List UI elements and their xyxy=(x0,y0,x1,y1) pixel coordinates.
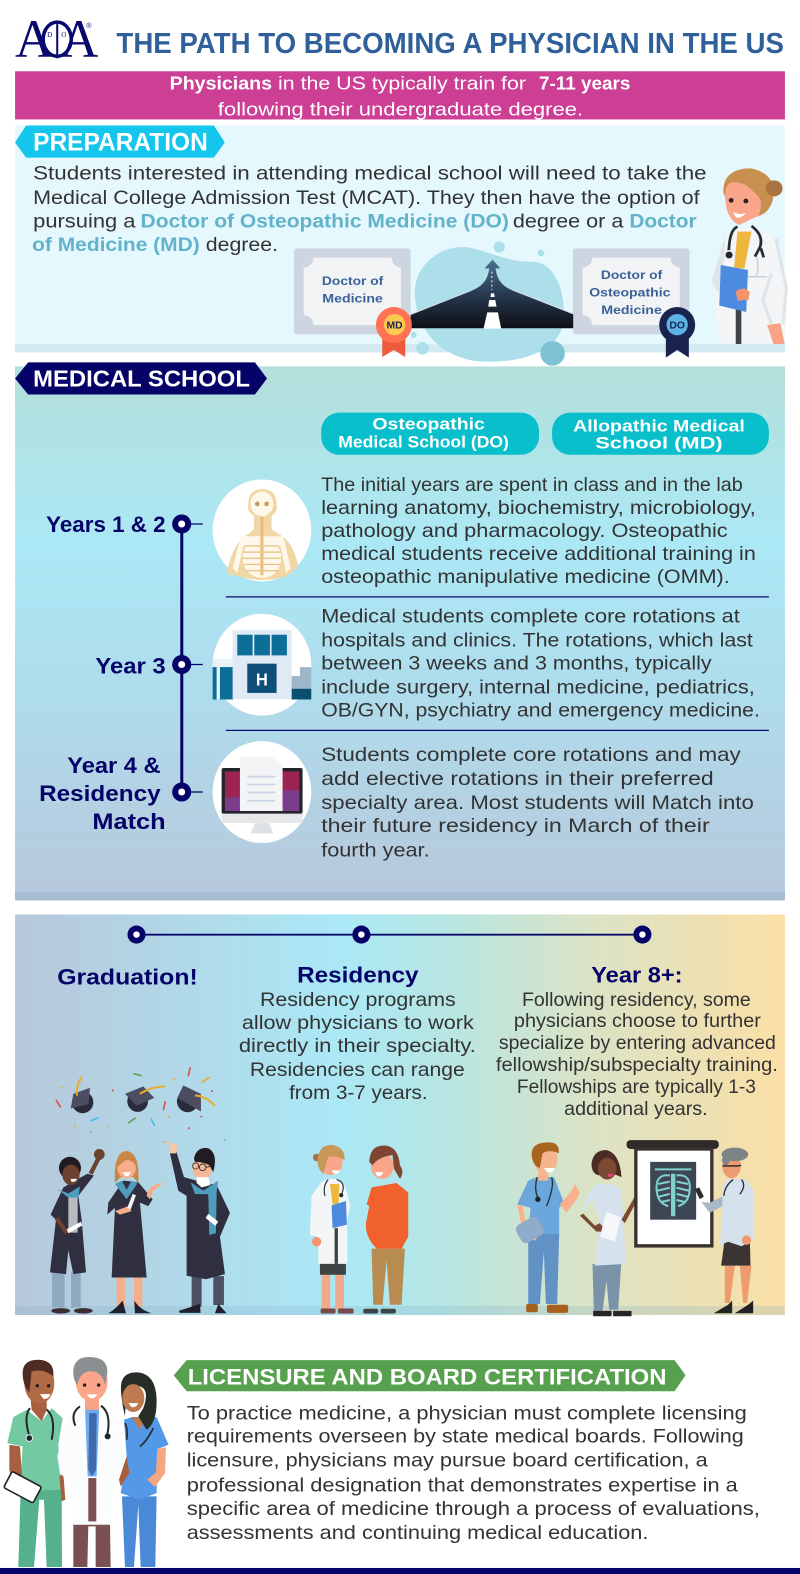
ribbon: DO xyxy=(659,307,695,358)
text: residency description: directly in their specialty. xyxy=(239,1036,476,1057)
graduate 3 xyxy=(168,1141,230,1313)
text: year 4 description: fourth year. xyxy=(321,840,430,861)
text: licensure paragraph: assessments and continuing medical education. xyxy=(187,1523,648,1544)
senior doctor xyxy=(695,1148,753,1313)
doctor xyxy=(310,1145,354,1314)
text: year 8+ description xyxy=(496,990,778,1120)
text: year 4 description xyxy=(321,745,754,861)
heading: graduation: Graduation! xyxy=(57,965,198,990)
label: year 4 and residency match: Year 4 & xyxy=(67,753,161,778)
logo: AOA: A xyxy=(60,9,98,69)
banner: training length xyxy=(15,71,785,119)
text: preparation paragraph: Doctor xyxy=(629,211,697,232)
text: year 3 description: include surgery, internal medicine, pediatrics, xyxy=(321,678,755,699)
male doctor xyxy=(514,1142,580,1313)
certificate: DO: Osteopathic xyxy=(589,285,671,299)
text: year 3 description: Medical students complete core rotations at xyxy=(321,606,741,627)
female doctor xyxy=(580,1150,646,1316)
pill: allopathic: Allopathic Medical xyxy=(573,417,745,436)
text: years 1 and 2 description: osteopathic manipulative medicine (OMM). xyxy=(321,567,730,588)
logo: AOA: A xyxy=(15,9,53,69)
text: preparation paragraph: pursuing a xyxy=(33,211,136,232)
label: year 4 and residency match xyxy=(39,753,166,834)
certificate: MD: Doctor of xyxy=(322,274,384,288)
divider 2 xyxy=(226,730,769,731)
text: year 3 description: between 3 weeks and 3 months, typically xyxy=(321,654,712,675)
panel: preparation xyxy=(15,125,787,366)
text: years 1 and 2 description: medical students receive additional training in xyxy=(321,544,756,565)
heading tag: licensure xyxy=(174,1360,686,1391)
doctor in white coat xyxy=(57,1357,127,1567)
certificate: DO: Medicine xyxy=(601,303,662,317)
text: preparation paragraph: of Medicine (MD) xyxy=(32,235,200,256)
blob xyxy=(415,247,564,362)
logo: AOA: D xyxy=(47,31,52,39)
icon: computer with document xyxy=(213,741,311,843)
pill: osteopathic xyxy=(321,413,539,455)
label: year 4 and residency match: Match xyxy=(92,809,166,834)
text: preparation paragraph: Medical College Admission Test (MCAT). They then have the option of xyxy=(33,188,700,209)
text: licensure paragraph: To practice medicine, a physician must complete licensing xyxy=(187,1403,747,1424)
text: year 8+ description: specialize by entering advanced xyxy=(499,1033,776,1054)
text: preparation paragraph: Doctor of Osteopathic Medicine (DO) xyxy=(141,211,509,232)
certificate: MD: Medicine xyxy=(322,292,383,306)
text: year 4 description: specialty area. Most students will Match into xyxy=(321,793,754,814)
ribbon: MD xyxy=(376,307,412,357)
heading tag: medical school: MEDICAL SCHOOL xyxy=(33,365,250,391)
illustration: degree path xyxy=(294,241,695,366)
heading: residency: Residency xyxy=(297,963,419,988)
text: preparation paragraph: degree. xyxy=(206,235,278,256)
icon: skeleton xyxy=(213,479,311,581)
logo: AOA xyxy=(15,9,98,69)
logo: AOA: O xyxy=(61,31,66,39)
text: licensure paragraph: specific area of medicine through a process of evaluations, xyxy=(187,1499,760,1520)
text: year 4 description: their future residency in March of their xyxy=(321,816,710,837)
divider 1 xyxy=(226,596,769,597)
banner: training length: in the US typically train for xyxy=(278,73,526,93)
caps and confetti xyxy=(56,1067,226,1143)
logo: AOA: ® xyxy=(86,22,92,30)
illustration: fellows with x-ray xyxy=(514,1140,753,1316)
text: years 1 and 2 description: The initial years are spent in class and in the lab xyxy=(321,475,743,496)
pregnant patient xyxy=(363,1146,408,1314)
illustration: graduates xyxy=(50,1067,408,1314)
text: year 8+ description: Fellowships are typically 1-3 xyxy=(517,1077,756,1098)
footer bar xyxy=(0,1568,800,1574)
text: residency description: Residencies can range xyxy=(250,1060,465,1081)
text: preparation paragraph xyxy=(32,164,707,256)
label: years 1 and 2: Years 1 & 2 xyxy=(46,512,166,537)
text: year 8+ description: fellowship/subspecialty training. xyxy=(496,1055,778,1076)
pill: osteopathic: Medical School (DO) xyxy=(338,433,509,452)
panel: after graduation xyxy=(15,914,785,1316)
pill: allopathic xyxy=(552,413,769,455)
text: years 1 and 2 description: pathology and pharmacology. Osteopathic xyxy=(321,521,728,542)
heading: year 8+: Year 8+: xyxy=(591,963,683,988)
heading tag: licensure: LICENSURE AND BOARD CERTIFICATION xyxy=(188,1364,666,1389)
text: preparation paragraph: degree or a xyxy=(513,211,624,232)
certificate: DO: Doctor of xyxy=(601,268,663,282)
text: residency description: allow physicians to work xyxy=(242,1013,474,1034)
banner: training length: following their undergraduate degree. xyxy=(218,99,583,119)
label: year 3: Year 3 xyxy=(95,654,166,679)
x-ray board xyxy=(627,1140,719,1246)
text: year 3 description: OB/GYN, psychiatry and emergency medicine. xyxy=(321,701,760,722)
label: year 4 and residency match: Residency xyxy=(39,781,161,806)
panel: medical school xyxy=(15,362,785,900)
text: years 1 and 2 description xyxy=(321,475,756,588)
text: preparation paragraph: Students interested in attending medical school will need to take the xyxy=(33,164,707,185)
pill: allopathic: School (MD) xyxy=(595,434,723,453)
text: year 8+ description: additional years. xyxy=(564,1099,708,1120)
title: THE PATH TO BECOMING A PHYSICIAN IN THE US xyxy=(116,28,784,60)
pill: osteopathic: Osteopathic xyxy=(372,415,485,434)
icon: hospital xyxy=(213,614,311,716)
text: licensure paragraph xyxy=(187,1403,760,1544)
text: residency description: from 3-7 years. xyxy=(289,1083,428,1104)
text: licensure paragraph: requirements overseen by state medical boards. Following xyxy=(187,1426,744,1447)
heading tag: medical school xyxy=(15,362,267,395)
doctor in blue scrubs xyxy=(119,1372,169,1567)
graduate 1 xyxy=(50,1149,105,1314)
text: year 8+ description: Following residency, some xyxy=(522,990,751,1011)
doctor in green scrubs xyxy=(4,1360,65,1567)
banner: training length: 7-11 years xyxy=(539,73,630,93)
illustration: three doctors xyxy=(4,1357,169,1567)
certificate: DO xyxy=(573,248,690,334)
text: year 3 description xyxy=(321,606,760,722)
timeline: horizontal xyxy=(127,926,651,944)
graduate 2 xyxy=(107,1151,163,1313)
illustration: doctor with folder xyxy=(712,168,787,344)
icon: hospital: H xyxy=(256,670,268,690)
timeline: years xyxy=(172,514,203,802)
text: licensure paragraph: licensure, physicians may pursue board certification, a xyxy=(187,1451,708,1472)
text: year 8+ description: physicians choose to further xyxy=(514,1011,762,1032)
text: year 4 description: add elective rotations in their preferred xyxy=(321,769,714,790)
text: licensure paragraph: professional designation that demonstrates expertise in a xyxy=(187,1476,738,1497)
road with arrow xyxy=(411,260,573,329)
banner: training length: Physicians xyxy=(170,73,272,93)
heading tag: preparation: PREPARATION xyxy=(33,129,208,157)
ribbon: MD: MD xyxy=(387,321,403,332)
ribbon: DO: DO xyxy=(669,321,685,332)
text: residency description: Residency programs xyxy=(260,990,456,1011)
text: residency description xyxy=(239,990,476,1104)
certificate: MD xyxy=(294,248,411,334)
text: year 4 description: Students complete core rotations and may xyxy=(321,745,741,766)
text: year 3 description: hospitals and clinics. The rotations, which last xyxy=(321,630,754,651)
text: years 1 and 2 description: learning anatomy, biochemistry, microbiology, xyxy=(321,498,756,519)
